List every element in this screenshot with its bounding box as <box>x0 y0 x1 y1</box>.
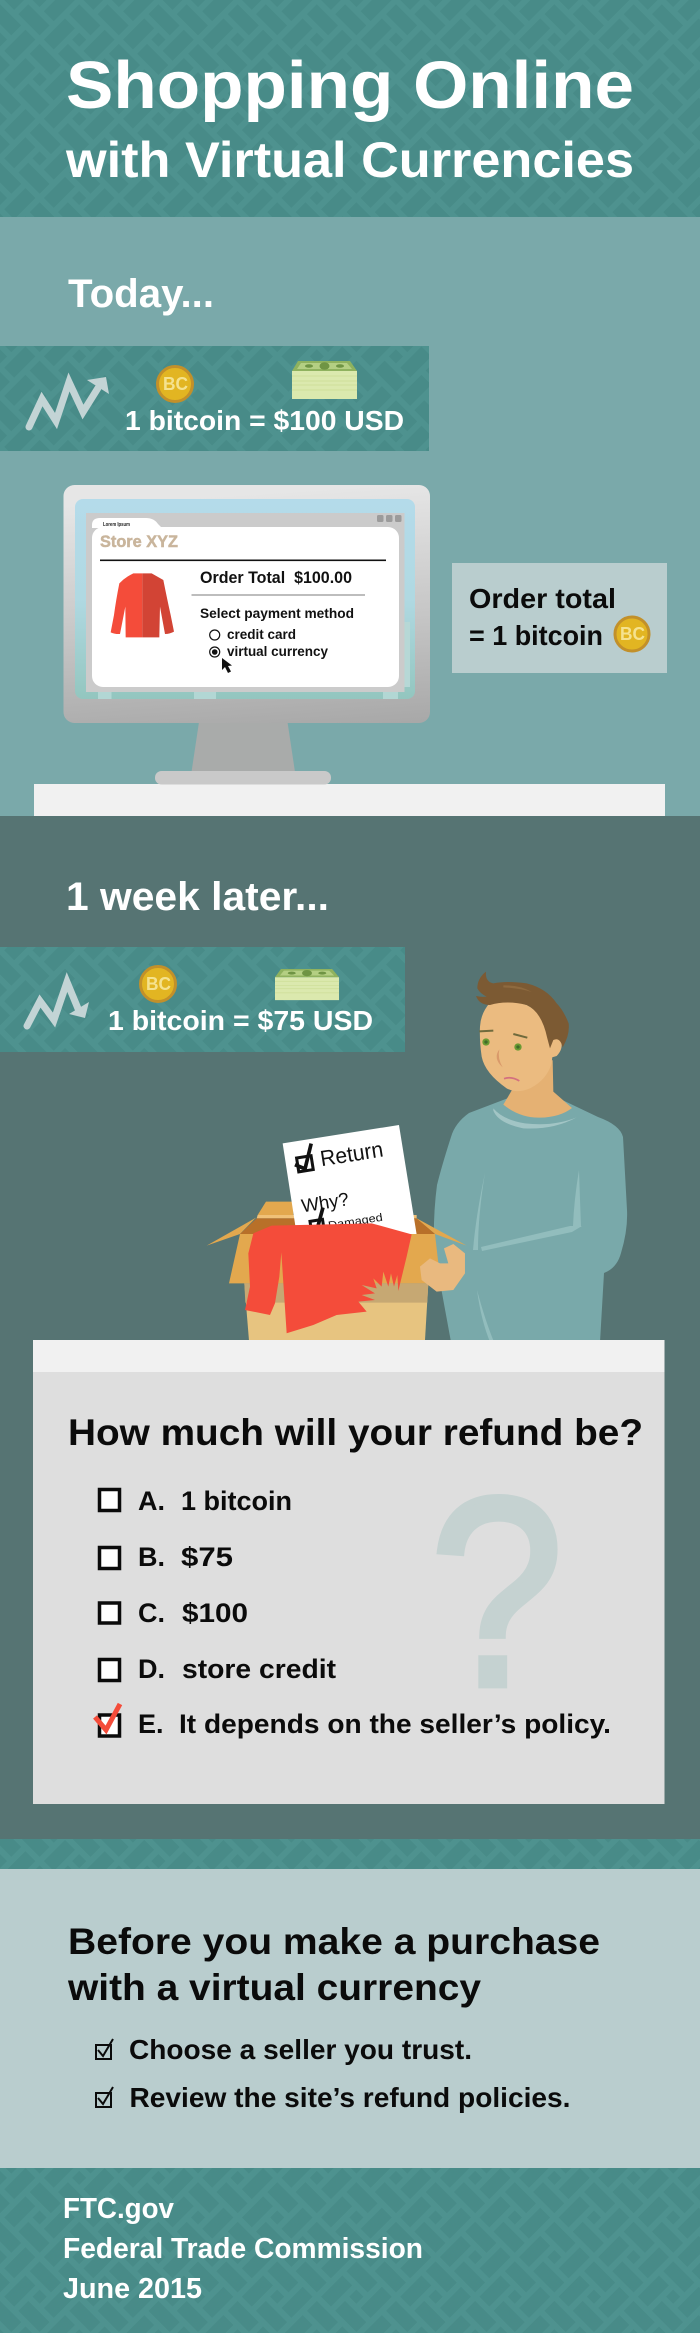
payment method: Select payment method <box>200 605 354 621</box>
pattern band <box>0 1839 700 1869</box>
heading: 1 week later: 1 week later... <box>66 875 329 919</box>
option E <box>95 1704 611 1739</box>
option A <box>100 1486 292 1516</box>
monitor bezel <box>64 485 430 723</box>
damaged red garment <box>245 1223 412 1333</box>
header banner <box>0 0 700 217</box>
option C <box>100 1598 248 1628</box>
order total: Order Total $100.00 <box>200 569 352 587</box>
rate banner: 1 bitcoin = $75 <box>0 947 405 1052</box>
option E: E. <box>138 1709 164 1739</box>
icon: bitcoin coin <box>615 617 649 651</box>
option D <box>100 1654 336 1684</box>
eyes <box>482 1038 490 1046</box>
title <box>65 48 634 188</box>
callout: order total <box>452 563 667 673</box>
tip: choose a seller: Choose a seller you trust. <box>129 2034 472 2065</box>
callout: order total: Order total <box>469 583 616 614</box>
radio: credit card: credit card <box>227 626 296 642</box>
box inside <box>240 1218 435 1234</box>
tip: review refund policies: Review the site’s refund policies. <box>130 2082 570 2113</box>
mouth <box>504 1078 519 1081</box>
title: with Virtual Currencies <box>65 132 634 188</box>
option C: $100 <box>182 1598 248 1628</box>
return form: Return <box>318 1137 385 1171</box>
browser window <box>86 513 404 699</box>
nose <box>497 1049 503 1067</box>
icon: bitcoin coin <box>158 366 192 402</box>
option B <box>100 1542 233 1572</box>
monitor base <box>155 771 331 784</box>
return form: Why? <box>300 1188 350 1216</box>
quiz heading: How much will your refund be? <box>68 1412 643 1453</box>
box flaps <box>207 1218 256 1246</box>
callout: order total: = 1 bitcoin <box>469 620 603 651</box>
rate text: 1 bitcoin = $100 USD <box>125 405 404 436</box>
monitor screen <box>75 499 415 699</box>
sweater body <box>434 1097 627 1342</box>
desk: today <box>34 784 665 816</box>
hair <box>476 972 569 1048</box>
computer monitor <box>64 485 430 784</box>
rate text: 1 bitcoin = $75 USD <box>108 1005 373 1036</box>
option A: 1 bitcoin <box>181 1486 292 1516</box>
tab label: Lorem Ipsum <box>103 522 130 528</box>
title: Shopping Online <box>66 48 634 123</box>
icon: hand holding box <box>420 1244 465 1292</box>
eyebrows <box>479 1031 527 1038</box>
advice heading: Before you make a purchase <box>68 1921 600 1962</box>
icon: rising chart arrow <box>29 377 109 427</box>
icon: red jacket <box>111 573 174 637</box>
footer: June 2015 <box>63 2273 202 2305</box>
icon: stack of money <box>275 969 339 1000</box>
heading: today: Today... <box>68 272 214 316</box>
advice heading: with a virtual currency <box>67 1967 481 2008</box>
option D: D. <box>138 1654 165 1684</box>
icon: falling chart arrow <box>27 982 89 1026</box>
footer: Federal Trade Commission <box>63 2233 423 2265</box>
quiz card <box>33 1340 664 1804</box>
box body <box>229 1234 441 1283</box>
option D: store credit <box>182 1654 336 1684</box>
return form: Damaged <box>327 1212 384 1232</box>
panel: before you make a purchase <box>0 1869 700 2168</box>
footer: FTC.gov <box>63 2193 174 2225</box>
monitor stand <box>192 722 295 772</box>
option A: A. <box>138 1486 165 1516</box>
sweater folds <box>473 1170 582 1342</box>
option B: $75 <box>181 1542 233 1572</box>
icon: bitcoin coin <box>140 966 176 1002</box>
illustration: worried man <box>434 972 627 1342</box>
ear <box>549 1039 562 1057</box>
advice heading <box>67 1921 600 2008</box>
window buttons <box>377 515 402 522</box>
icon: stack of money <box>292 361 357 399</box>
footer <box>0 2168 700 2333</box>
illustration: return box <box>207 1125 467 1341</box>
icon: mouse cursor <box>222 658 232 673</box>
large question mark: ? <box>430 1441 563 1742</box>
option E: It depends on the seller’s policy. <box>179 1709 611 1739</box>
icon: bitcoin coin: BC <box>620 624 645 644</box>
icon: bitcoin coin: BC <box>163 374 188 394</box>
rate banner: 1 bitcoin = $100 <box>0 346 429 451</box>
section backgrounds <box>0 217 700 1840</box>
radio: virtual currency: virtual currency <box>227 643 328 659</box>
option B: B. <box>138 1542 165 1572</box>
store name: Store XYZ <box>100 532 178 551</box>
icon: bitcoin coin: BC <box>146 974 171 994</box>
return form <box>283 1125 417 1236</box>
neck and head <box>476 972 577 1129</box>
option C: C. <box>138 1598 165 1628</box>
